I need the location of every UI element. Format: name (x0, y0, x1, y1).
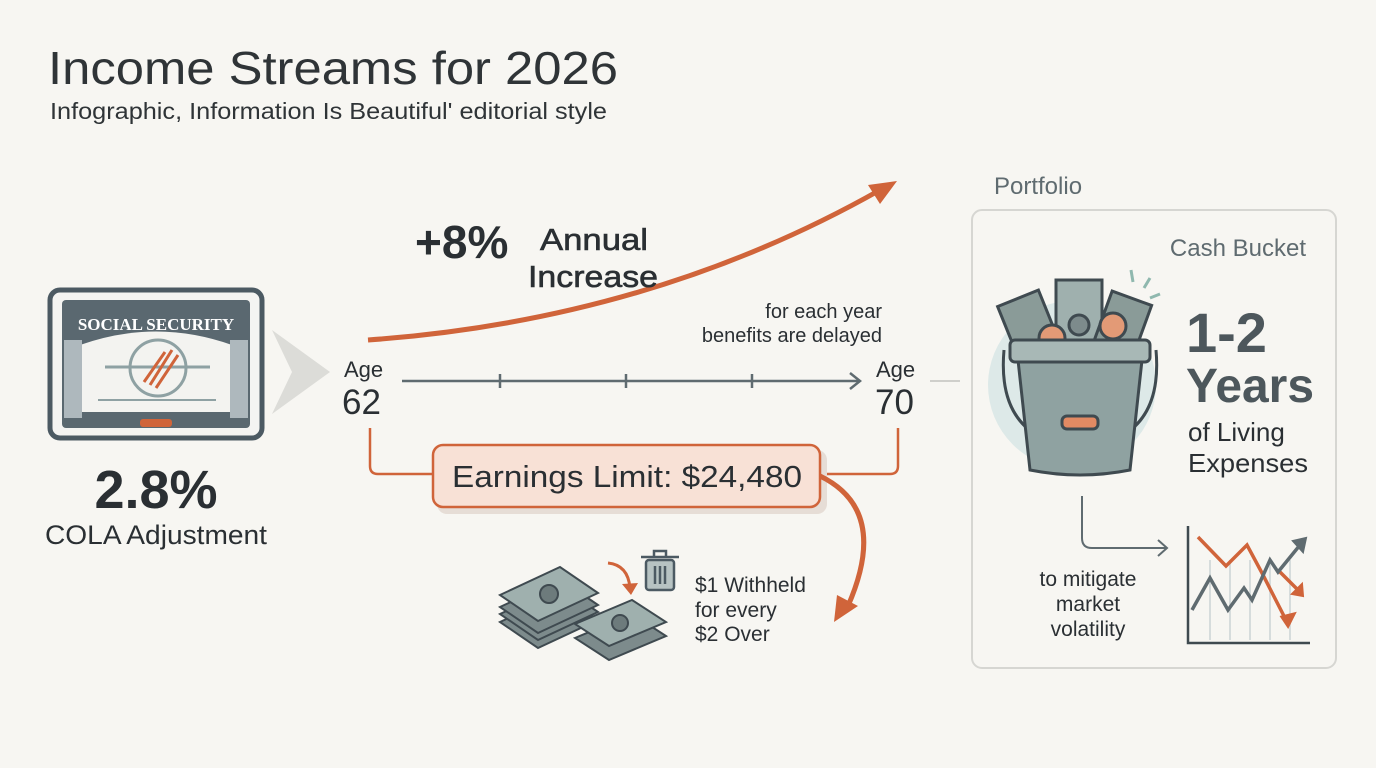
heading: portfolio: Portfolio (994, 173, 1082, 200)
heading: +8% Annual Increase: +8% (415, 216, 508, 268)
icon: social security card (50, 290, 262, 438)
stat: 1-2 years (1186, 301, 1314, 413)
title: Income Streams for 2026 (48, 42, 618, 94)
arrow: down curve (820, 476, 864, 622)
chart: volatility (1188, 526, 1310, 643)
stat: 1-2 years: 1-2 (1186, 301, 1267, 364)
text: delayed note: benefits are delayed (702, 325, 882, 347)
stat: 2.8%: 2.8% (94, 460, 218, 520)
text: mitigate (1040, 568, 1136, 641)
label: age 62: 62 (342, 383, 381, 422)
icon: social security card: SOCIAL SECURITY (78, 315, 234, 334)
text: mitigate: market (1056, 593, 1120, 616)
text: delayed note: for each year (765, 301, 882, 323)
connector (930, 380, 960, 382)
arrow: 8% increase curve (368, 181, 897, 340)
timeline (402, 373, 860, 389)
callout: earnings limit (433, 445, 827, 514)
text: mitigate: volatility (1051, 618, 1126, 641)
text: living expenses (1188, 417, 1308, 478)
icon: bucket (988, 270, 1160, 475)
text: mitigate: to mitigate (1040, 568, 1136, 591)
subtitle: Infographic, Information Is Beautiful' editorial style (50, 98, 607, 124)
label: age 70 (875, 357, 915, 422)
text: withheld: for every (695, 599, 777, 622)
bracket (370, 428, 898, 474)
label: COLA: COLA Adjustment (45, 520, 268, 550)
callout: earnings limit: Earnings Limit: $24,480 (452, 459, 802, 494)
text: living expenses: of Living (1188, 417, 1285, 447)
label: age 62 (342, 357, 383, 422)
label: age 62: Age (344, 357, 383, 382)
stat: 1-2 years: Years (1186, 360, 1314, 413)
panel: portfolio (972, 210, 1336, 668)
arrow: to chart (1082, 496, 1167, 556)
arrow: small orange (608, 563, 630, 588)
label: age 70: Age (876, 357, 915, 382)
text: living expenses: Expenses (1188, 448, 1308, 478)
label: age 70: 70 (875, 383, 914, 422)
arrow: chevron (272, 330, 330, 414)
heading: +8% Annual Increase: Increase (528, 259, 658, 294)
heading: cash bucket: Cash Bucket (1170, 235, 1306, 262)
icon: trash (641, 551, 679, 590)
heading: +8% Annual Increase: Annual (540, 222, 648, 257)
text: delayed note (702, 301, 882, 347)
text: withheld (695, 574, 806, 646)
heading: +8% Annual Increase (415, 216, 658, 294)
text: withheld: $2 Over (695, 623, 770, 646)
icon: money stacks (500, 567, 666, 660)
text: withheld: $1 Withheld (695, 574, 806, 597)
